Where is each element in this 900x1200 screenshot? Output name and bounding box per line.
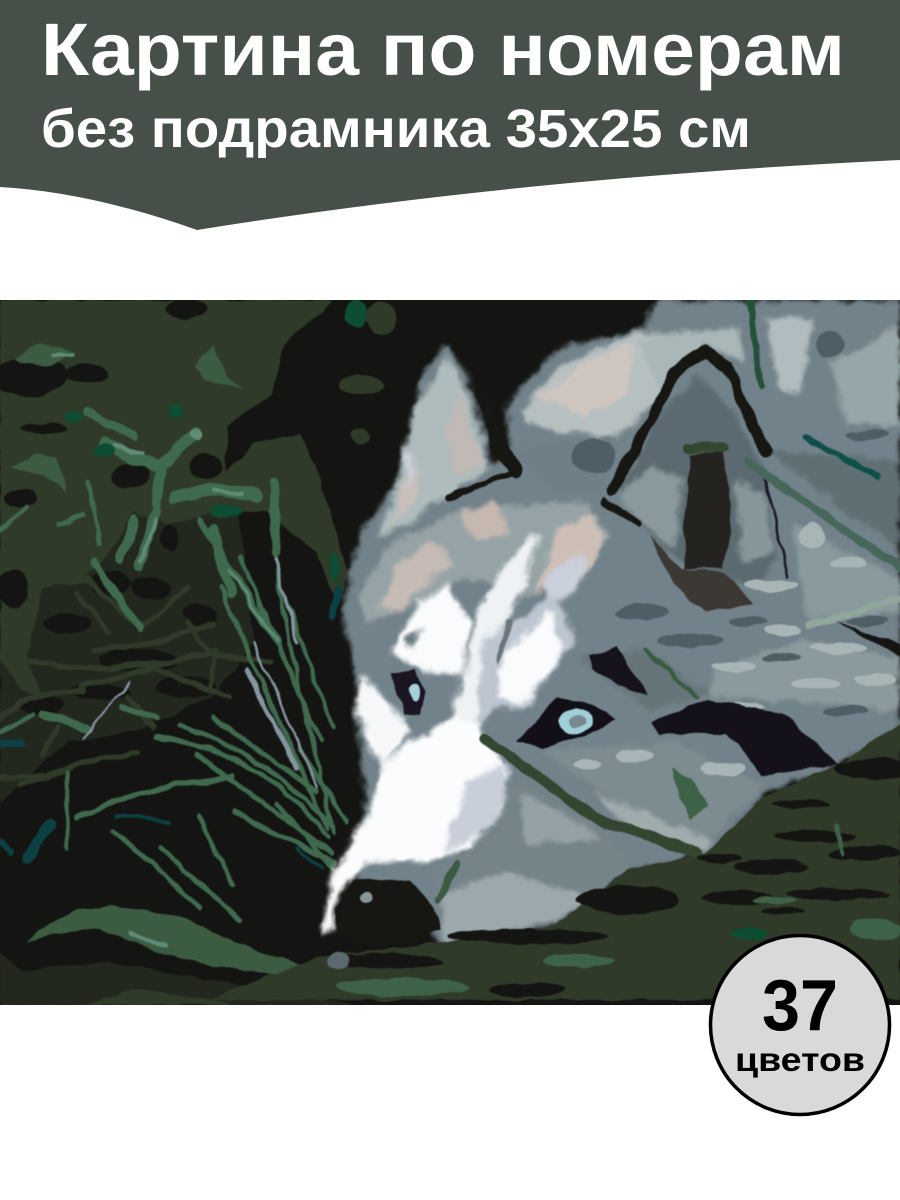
subtitle: без подрамника 35x25 см (41, 99, 751, 159)
pale leaf highlights (53, 356, 277, 946)
blaze and highlights (450, 532, 542, 729)
mottled fur strokes (572, 523, 895, 776)
foreground ground (209, 724, 900, 1000)
olive patches on dark (338, 302, 396, 445)
green grass strokes (0, 413, 347, 921)
title: Картина по номерам (41, 8, 845, 91)
cheek (542, 742, 764, 840)
deep green patches (346, 299, 768, 940)
badge label: цветов (735, 1041, 865, 1078)
left eye (392, 668, 425, 715)
wolf fur shading (324, 300, 900, 947)
ground blotches (331, 758, 900, 997)
green leaves (10, 343, 300, 975)
header banner (0, 0, 900, 230)
right ear dark streak (684, 452, 733, 568)
ear outlines (448, 351, 788, 577)
neck fur (708, 639, 900, 711)
badge: 37 colours (710, 936, 890, 1114)
painting: husky in the grass (0, 299, 900, 1006)
dark fill around twigs (0, 953, 360, 1006)
dark mid-tone undergrowth (0, 498, 253, 804)
badge number: 37 (762, 966, 838, 1046)
foliage and grass on the left (0, 299, 361, 1006)
teal accents (0, 588, 337, 867)
dark marks (590, 646, 647, 695)
nose (335, 878, 440, 947)
lower jaw (490, 778, 510, 828)
forehead (357, 501, 609, 621)
grey blades (83, 561, 317, 786)
muzzle grass band (486, 740, 697, 854)
black blotches (0, 299, 223, 714)
left ear (376, 358, 490, 537)
ground leaves (328, 769, 900, 996)
wolf details (209, 299, 900, 1000)
muzzle (324, 717, 511, 936)
upper back highlights (520, 328, 672, 440)
right ear interior (620, 376, 779, 586)
deep green dots (64, 302, 361, 579)
grass over the wolf (438, 300, 900, 898)
right eye (518, 697, 616, 749)
fur silhouette (342, 300, 900, 947)
twig network (0, 579, 273, 786)
olive foliage mass (0, 300, 347, 696)
